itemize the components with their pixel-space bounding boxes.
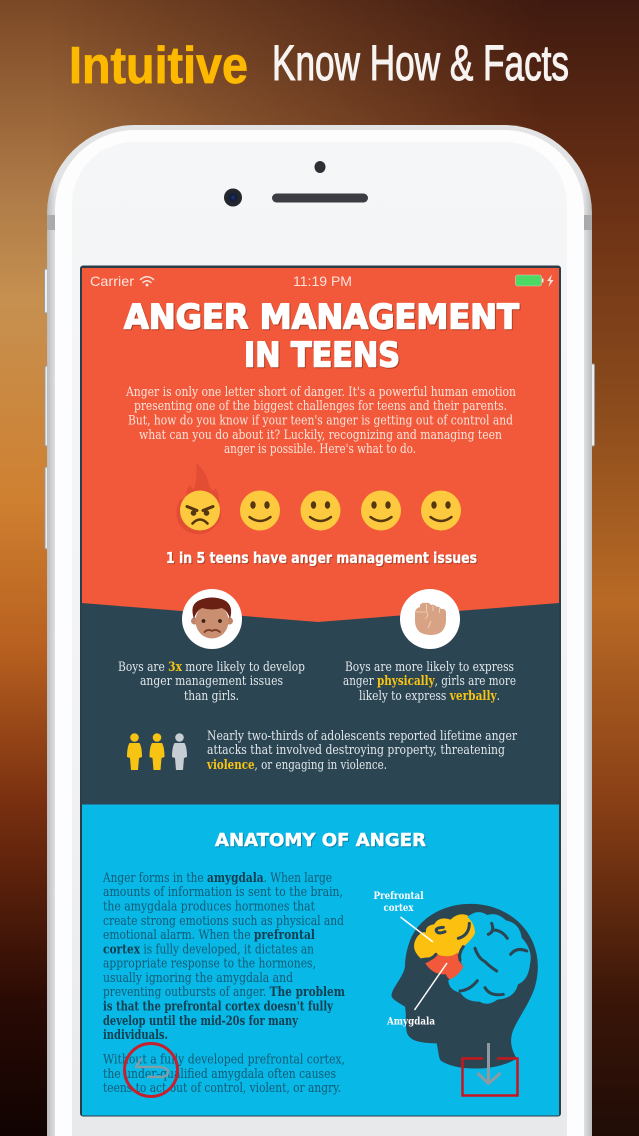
text: amygdala paragraph: create strong emotions such as physical and [103,914,344,929]
brain folds [423,923,527,995]
title line 2: IN TEENS [244,336,400,376]
label: amygdala: Amygdala [386,1016,435,1028]
text: amygdala paragraph: usually ignoring the amygdala and [103,971,293,986]
speaker [272,194,368,202]
top headline [69,35,569,95]
label: prefrontal cortex [374,890,424,914]
text: amygdala paragraph: cortex is fully developed, it dictates an [103,942,314,958]
text: under-qualified paragraph: teens to act out of control, violent, or angry. [103,1081,341,1096]
status bar [90,273,554,289]
text: under-qualified paragraph [103,1052,345,1096]
leader line: prefrontal cortex [400,917,433,942]
intro paragraph: what can you do about it? Luckily, recognizing and managing teen [139,428,502,443]
leader line: amygdala [414,963,447,1010]
icon: smiley 4 [421,490,461,530]
text: amygdala paragraph: Anger forms in the amygdala. When large [102,871,332,886]
headline: Intuitive: Intuitive [69,37,248,95]
amygdala (orange) [425,952,464,982]
text: boys 3x: than girls. [184,689,239,704]
text: two-thirds of adolescents: violence, or engaging in violence. [206,758,387,773]
title [124,298,520,376]
text: boys physically, girls verbally: likely to express verbally. [359,689,500,704]
text: amygdala paragraph: is that the prefrontal cortex doesn't fully [103,1000,334,1014]
icon: wifi [140,277,154,286]
text: amygdala paragraph: amounts of information is sent to the brain, [103,885,343,900]
text: under-qualified paragraph: the under-qualified amygdala often causes [103,1067,336,1082]
phone side buttons [44,269,594,549]
overlay: swipe-back hint circled in red [124,1044,178,1096]
text: two-thirds of adolescents: Nearly two-thirds of adolescents reported lifetime anger [207,729,517,744]
text: amygdala paragraph: preventing outbursts of anger. The problem [103,985,346,1000]
label: prefrontal cortex: Prefrontal [374,890,424,902]
intro paragraph: But, how do you know if your teen's anger is getting out of control and [128,414,513,428]
person 1 [127,733,142,770]
phone body [47,125,592,1136]
text: amygdala paragraph: develop until the mid-20s for many [103,1014,299,1029]
text: under-qualified paragraph: Without a fully developed prefrontal cortex, [103,1052,345,1068]
text: two-thirds of adolescents: attacks that involved destroying property, threatening [207,743,505,758]
title line 1: ANGER MANAGEMENT [124,298,520,338]
prefrontal cortex (yellow) [414,914,476,959]
label: prefrontal cortex: cortex [384,902,414,914]
text: boys 3x [118,660,305,704]
intro paragraph [125,385,516,457]
icon: smiley 2 [300,490,340,530]
heading: anatomy of anger: ANATOMY OF ANGER [215,830,426,851]
battery [516,274,554,287]
icon: angry face with flame [176,463,221,534]
intro paragraph: presenting one of the biggest challenges for teens and their parents. [134,399,507,414]
statistic: 1 in 5 teens: 1 in 5 teens have anger management issues [166,549,477,567]
brain (blue) [448,912,531,1004]
person 3 [172,733,187,770]
overlay: download hint boxed in red [462,1043,518,1096]
front camera [224,188,242,206]
diagram: head and brain [374,890,538,1069]
clock: 11:19 PM [293,273,352,289]
person 2 [150,733,164,770]
head silhouette [392,904,538,1069]
intro paragraph: anger is possible. Here's what to do. [224,442,416,457]
icon: sad boy [182,589,242,649]
text: amygdala paragraph: emotional alarm. When the prefrontal [103,928,316,943]
intro paragraph: Anger is only one letter short of danger. It's a powerful human emotion [125,385,516,400]
text: amygdala paragraph: appropriate response to the hormones, [103,956,316,972]
text: boys physically, girls verbally: anger physically, girls are more [343,674,516,689]
text: amygdala paragraph [102,871,346,1043]
phone mockup [44,125,594,1136]
icon: smiley 1 [240,490,280,530]
text: amygdala paragraph: individuals. [103,1028,168,1043]
sensor dot [314,161,326,173]
panel: red intro [82,268,559,628]
text: boys 3x: anger management issues [140,674,283,689]
panel: anatomy of anger [82,804,559,1116]
text: boys physically, girls verbally [343,660,516,704]
text: boys 3x: Boys are 3x more likely to develop [118,660,305,675]
screen frame [80,266,561,1116]
text: amygdala paragraph: the amygdala produces hormones that [103,900,315,914]
icon: three people, two of three highlighted [127,733,187,770]
panel: dark statistics [82,589,559,804]
icon: clenched fist [400,589,460,649]
emoji row: 1 in 5 [176,463,461,534]
text: boys physically, girls verbally: Boys are more likely to express [345,660,514,675]
carrier label: Carrier [90,273,134,289]
text: two-thirds of adolescents [206,729,517,773]
icon: smiley 3 [361,490,401,530]
